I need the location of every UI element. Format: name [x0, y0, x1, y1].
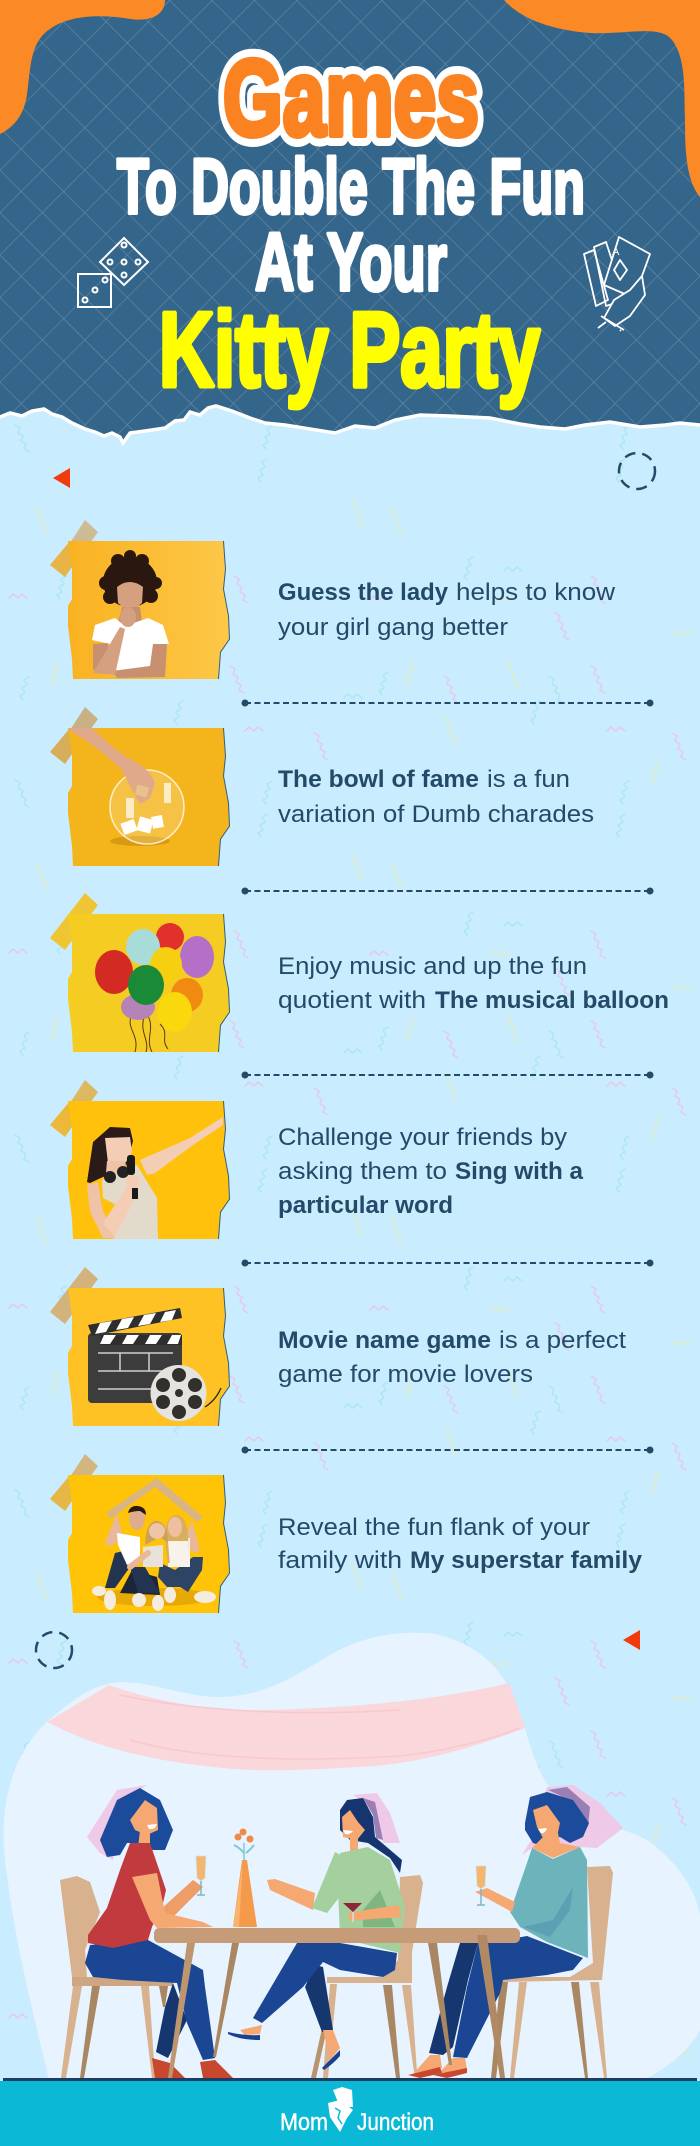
row 3 text [278, 953, 669, 1014]
row 3 text: The musical balloon [435, 987, 669, 1014]
divider 2 [242, 888, 654, 894]
row 5 text: Movie name game [278, 1327, 491, 1354]
row 6 text [278, 1514, 643, 1574]
MomJunction logo [280, 2087, 434, 2136]
row 1: guess the lady [50, 520, 235, 681]
row 1 text: your girl gang better [278, 614, 508, 641]
title: Kitty Party [159, 291, 540, 409]
dashed circle top [619, 453, 655, 489]
torn edge [218, 541, 229, 679]
table and vase [154, 1828, 520, 2078]
divider 3 [242, 1072, 654, 1078]
row 6: my superstar family [50, 1454, 235, 1615]
footer band [0, 2081, 700, 2146]
party illustration backdrop blob [3, 1633, 700, 2080]
row 6 text: family with [278, 1547, 402, 1574]
row 6 text: Reveal the fun flank of your [278, 1514, 590, 1541]
row 1 text: Guess the lady [278, 579, 449, 606]
tape [50, 1454, 98, 1511]
row 2 text [278, 766, 594, 828]
middle woman [228, 1793, 405, 2070]
row 4 text: particular word [278, 1192, 453, 1219]
right chair [491, 1866, 613, 2078]
left chair [60, 1876, 173, 2078]
title: Games [223, 37, 479, 158]
photo: balloons [60, 914, 235, 1054]
right woman [408, 1785, 623, 2078]
photo: singer [60, 1101, 235, 1241]
pink banner [47, 1683, 525, 1770]
icon: hand holding cards: A [612, 246, 620, 258]
title: At Your [255, 217, 447, 308]
red triangle top [53, 468, 70, 488]
row 1 text: helps to know [456, 579, 616, 606]
torn edge [218, 728, 229, 866]
title: Games [223, 37, 479, 158]
icon: dice [78, 238, 148, 307]
row 1 text [278, 579, 616, 641]
row 5: movie name game [50, 1267, 235, 1428]
divider 4 [242, 1260, 654, 1266]
floor line [3, 2078, 697, 2081]
torn edge [218, 1101, 229, 1239]
row 4 text [278, 1124, 584, 1219]
row 3 text: Enjoy music and up the fun [278, 953, 587, 980]
photo: hand and glass bowl [60, 728, 235, 868]
photo: clapperboard and film reel [60, 1288, 235, 1428]
orange blob top right [504, 0, 700, 197]
row 5 text [278, 1327, 626, 1388]
torn edge [218, 1288, 229, 1426]
tape [50, 1267, 98, 1324]
torn edge [218, 914, 229, 1052]
tape [50, 1080, 98, 1137]
row 5 text: is a perfect [499, 1327, 626, 1354]
row 5 text: game for movie lovers [278, 1361, 533, 1388]
divider 1 [242, 700, 654, 706]
title [117, 37, 585, 409]
row 2 text: The bowl of fame [278, 766, 479, 793]
row 2 text: is a fun [487, 766, 570, 793]
photo: thinking woman [60, 541, 235, 681]
row 6 text: My superstar family [410, 1547, 643, 1574]
icon: hand holding cards [584, 237, 650, 331]
row 4: sing with a word [50, 1080, 235, 1241]
torn edge [218, 1475, 229, 1613]
orange blob top left [0, 0, 165, 134]
row 4 text: asking them to [278, 1158, 447, 1185]
row 3 text: quotient with [278, 987, 426, 1014]
row 2: bowl of fame [50, 707, 235, 868]
row 3: musical balloon [50, 893, 235, 1054]
MomJunction logo: Junction [357, 2109, 434, 2136]
MomJunction logo: Mom [280, 2109, 328, 2136]
dashed circle bottom [36, 1632, 72, 1668]
row 2 text: variation of Dumb charades [278, 801, 594, 828]
row 4 text: Sing with a [455, 1158, 584, 1185]
middle chair [311, 1875, 423, 2078]
tape [50, 893, 98, 950]
photo: family under a cardboard roof [60, 1475, 235, 1615]
row 4 text: Challenge your friends by [278, 1124, 567, 1151]
left woman [85, 1785, 233, 2078]
tape [50, 520, 98, 577]
divider 5 [242, 1446, 654, 1454]
tape [50, 707, 98, 764]
red triangle bottom [623, 1630, 640, 1650]
header panel [0, 0, 700, 443]
